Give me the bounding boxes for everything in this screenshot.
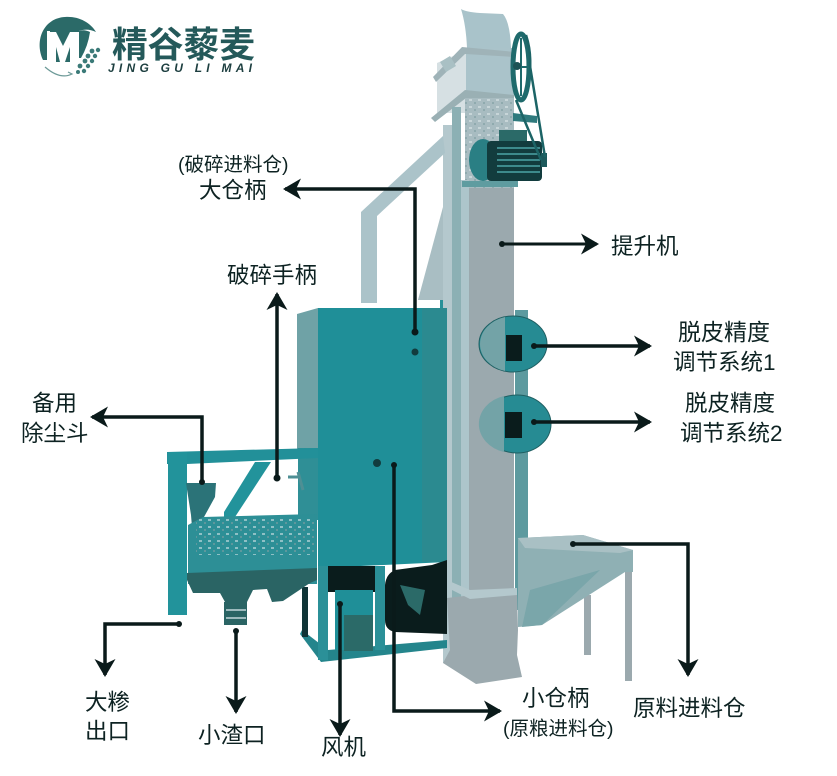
elevator column [440,98,528,668]
outlet pipe [361,136,445,303]
arrow: 小仓柄 [391,462,500,711]
back panel [298,448,318,520]
panel: adjust circle 1 [479,316,547,372]
label: 调节系统2: 调节系统2 [680,421,783,446]
logo [40,17,255,76]
label: 出口: 出口 [85,719,130,744]
drum texture [196,519,314,555]
label: 原粮进料仓: (原粮进料仓) [503,718,614,740]
top bar [167,448,318,464]
arrow: 提升机 [499,241,597,247]
drum underside [187,568,317,602]
label: 小仓柄: 小仓柄 [522,686,590,711]
belt pulley [513,34,545,160]
machine: elevator [361,9,547,684]
pipe strut [418,207,443,300]
diagonal brace [224,462,271,517]
arrow: 小渣口 [233,628,239,712]
cabinet right shade [422,308,447,562]
arrow: 破碎手柄 [274,294,280,482]
cabinet side [297,308,318,450]
label: 破碎手柄: 破碎手柄 [227,263,317,288]
motor bracket [513,113,537,123]
arrow: 原料进料仓 [570,541,688,675]
drive motor [462,130,547,187]
label: 破碎进料仓: (破碎进料仓) [178,154,288,176]
arrow: 风机 [337,601,343,735]
support frame [300,630,447,662]
machine: crusher [167,448,318,625]
crusher handle [288,472,303,490]
label: 脱皮精度 1: 脱皮精度 [678,319,770,345]
label: 大糁: 大糁 [85,690,130,715]
label: 小渣口: 小渣口 [198,723,266,748]
fan housing [385,560,447,634]
fan highlight [400,585,425,615]
drum [188,514,317,584]
label: 除尘斗: 除尘斗 [21,421,89,446]
panel: adjust circle 2 [479,395,551,453]
arrow: 备用除尘斗 [92,417,205,485]
elevator head chute [461,9,511,48]
label: 大仓柄: 大仓柄 [199,178,267,203]
label: 备用: 备用 [32,391,77,416]
motor box [335,590,373,651]
machine: lower frame and fan [300,560,447,662]
elevator flange [442,578,517,599]
arrow: 脱皮精度调节系统2 [531,419,650,425]
arrow: 脱皮精度调节系统1 [531,343,650,349]
elevator head box [431,47,515,122]
machine: raw material hopper [518,535,633,681]
logo emblem [40,17,100,76]
label: 提升机: 提升机 [611,234,679,259]
label: 原料进料仓: 原料进料仓 [633,696,746,721]
logo chinese name: 精谷藜麦 [112,24,255,65]
label: 脱皮精度 2: 脱皮精度 [685,391,775,416]
logo pinyin name: JING GU LI MAI [108,61,253,75]
hopper body [518,535,633,627]
label: 调节系统1: 调节系统1 [673,350,776,375]
left post [168,452,187,615]
hopper rim [518,535,633,553]
label: 风机: 风机 [321,735,367,760]
hopper lower shade [522,570,600,627]
arrow: 大仓柄 [285,189,418,336]
hopper legs [584,572,632,681]
small outlet chute [224,602,247,625]
dust hopper [186,483,216,527]
under-cabinet dark [328,566,385,592]
cabinet face [318,308,447,568]
machine: main cabinet [297,308,447,568]
arrow: 大糁出口 [105,621,182,675]
elevator base [443,590,522,684]
cabinet knobs [373,348,418,467]
